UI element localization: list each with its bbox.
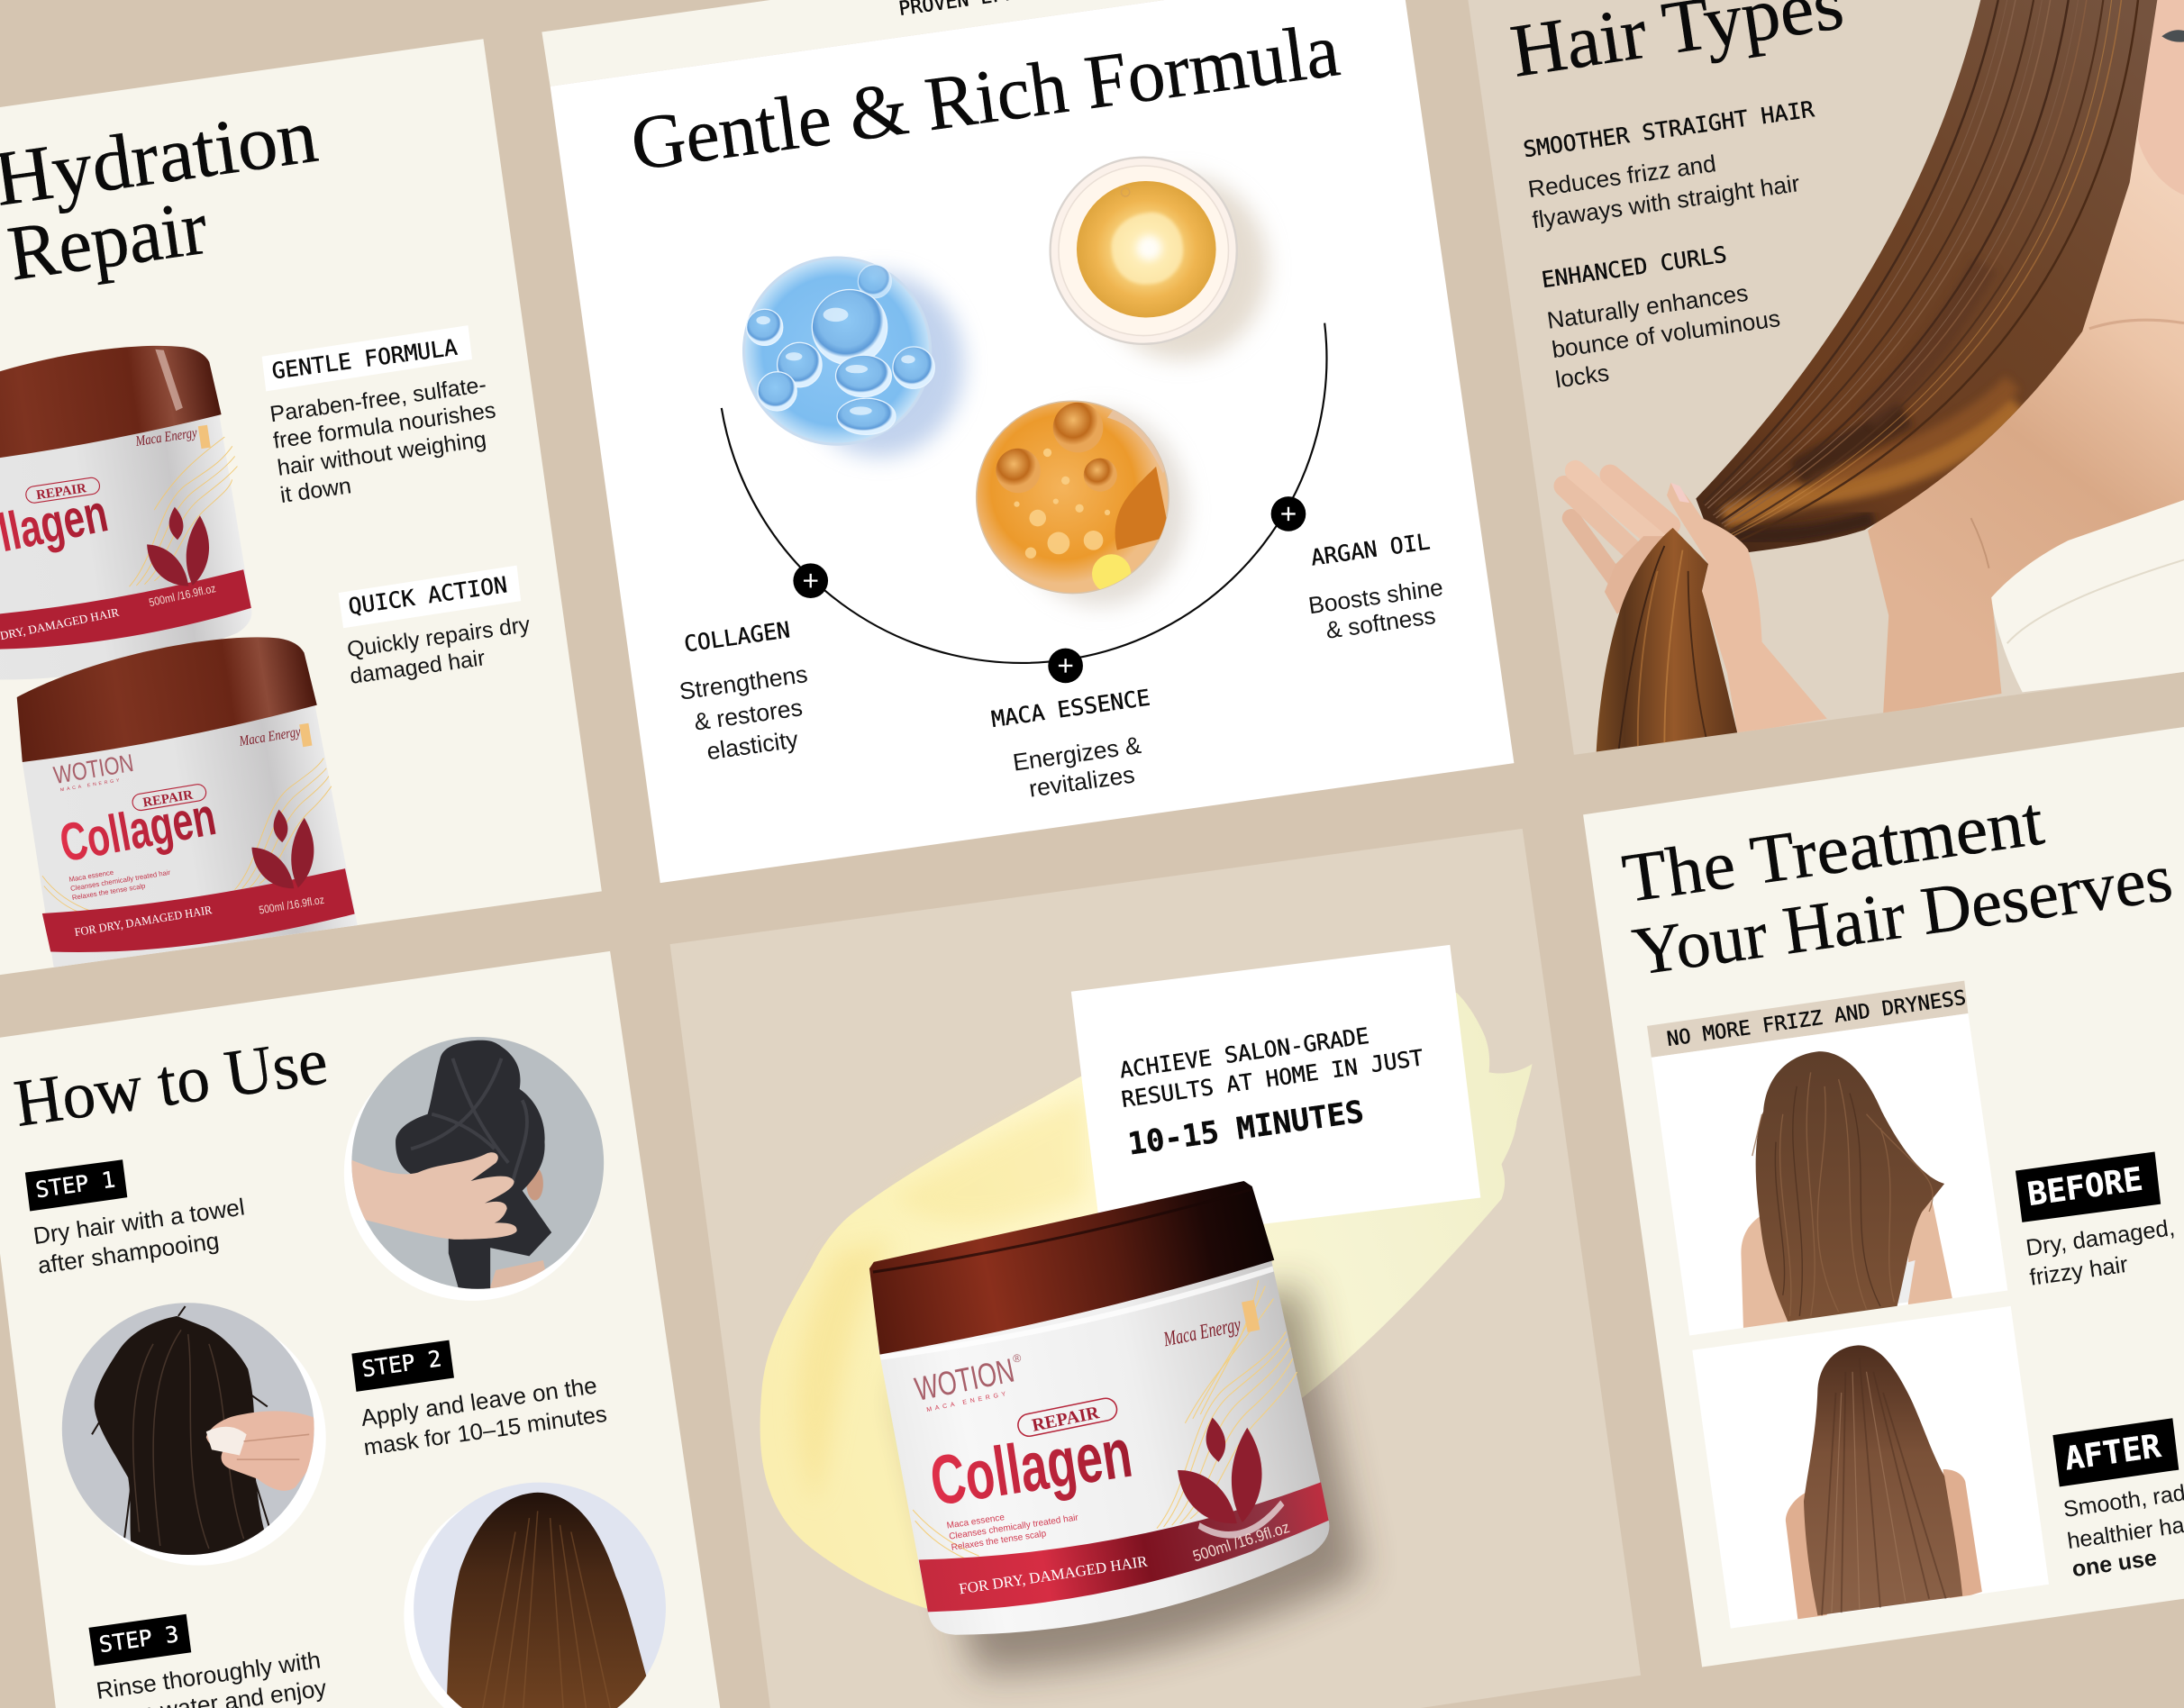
top strip with tagline: [541, 0, 1164, 86]
node: argan plus: [1271, 496, 1306, 531]
node: collagen plus: [793, 563, 828, 598]
label: collagen: & restores: [692, 694, 805, 736]
text: quick action description: damaged hair: [349, 646, 487, 689]
step 2 text: mask for 10–15 minutes: [362, 1402, 608, 1460]
step 1 tag: STEP 1: [34, 1166, 117, 1203]
jar label text: 500ml /16.9fl.oz: [1190, 1518, 1292, 1566]
text: after description: one use: [2070, 1545, 2159, 1582]
product jar: center: [856, 1178, 1340, 1655]
text: gentle formula description: free formula nourishes: [271, 397, 497, 454]
jar label text: Maca Energy: [1161, 1313, 1243, 1351]
step 3 tag: [88, 1614, 191, 1666]
tag: after: AFTER: [2062, 1428, 2163, 1477]
step 1 text: after shampooing: [36, 1227, 221, 1279]
step 2 tag: STEP 2: [360, 1345, 443, 1382]
panel: hydration repair: [0, 39, 602, 1009]
jar: upper: Maca Energy: [134, 425, 199, 450]
tag: gentle formula: GENTLE FORMULA: [270, 334, 459, 384]
skin: shoulder, arm and neck: [1868, 123, 2184, 713]
text: after description: [2061, 1475, 2184, 1582]
note card: RESULTS AT HOME IN JUST: [1120, 1044, 1425, 1113]
jar label text: [906, 1300, 1304, 1614]
jar: lower: Cleanses chemically treated hair: [70, 868, 171, 893]
jar: lower: [16, 637, 357, 968]
text: smoother straight hair: Reduces frizz and: [1526, 150, 1717, 203]
panel: salon-grade results: [670, 829, 1641, 1708]
photo: woman with long hair: [1564, 0, 2184, 753]
jar label text: WOTION: [912, 1351, 1017, 1408]
photo: rinsed straight hair: [404, 1476, 676, 1708]
text: gentle formula description: Paraben-free, sulfate-: [268, 372, 487, 427]
step 3 text: Rinse thoroughly with: [95, 1646, 323, 1704]
jar label text: MACA ENERGY: [926, 1391, 1010, 1413]
jar: upper: [0, 346, 251, 679]
jar label text: Cleanses chemically treated hair: [949, 1513, 1079, 1542]
jar: lower: FOR DRY, DAMAGED HAIR: [74, 903, 214, 939]
hand: fingers: [1564, 471, 1670, 585]
step 1 tag: [25, 1159, 127, 1211]
text: enhanced curls: Naturally enhances: [1545, 279, 1750, 334]
tag: after: [2052, 1418, 2179, 1486]
hand: holding thumb and forearm: [1667, 483, 1827, 734]
jar label text: Relaxes the tense scalp: [951, 1529, 1047, 1553]
node: maca plus: [1048, 649, 1083, 683]
text: enhanced curls: locks: [1553, 359, 1611, 393]
arc connector: [722, 323, 1326, 663]
step 2 tag: [351, 1340, 454, 1392]
jar: lower: Collagen: [55, 786, 220, 873]
heading: the treatment: Your Hair Deserves: [1628, 840, 2177, 990]
text: quick action description: [346, 613, 532, 689]
dish: collagen blue: [744, 258, 964, 457]
text: before description: Dry, damaged,: [2025, 1215, 2177, 1261]
heading: the treatment: The Treatment: [1618, 781, 2049, 917]
step 2 text: [359, 1371, 608, 1460]
text: gentle formula description: [268, 372, 497, 508]
jar: upper: 500ml /16.9fl.oz: [148, 582, 217, 609]
text: before description: frizzy hair: [2028, 1252, 2130, 1291]
jar: lower: MACA ENERGY: [60, 777, 123, 793]
dish: maca essence amber: [977, 390, 1187, 605]
heading: hydration repair: [0, 92, 323, 297]
step 3 tag: STEP 3: [97, 1621, 180, 1658]
label: argan oil: Boosts shine: [1306, 574, 1444, 619]
jar: lower: WOTION: [51, 749, 135, 789]
label: collagen: [678, 616, 809, 765]
note card: [1071, 945, 1480, 1244]
heading: how to use: How to Use: [10, 1024, 332, 1141]
jar: lower: Maca Energy: [238, 724, 303, 750]
jar label text: Maca essence: [946, 1513, 1006, 1531]
photo: after smooth hair: [1692, 1306, 2049, 1629]
label: maca essence: MACA ESSENCE: [989, 684, 1151, 732]
jar label text: Collagen: [925, 1414, 1137, 1521]
jar: lower: Relaxes the tense scalp: [71, 882, 146, 902]
long hair mass: [1671, 0, 2173, 564]
label: collagen: Strengthens: [678, 660, 809, 705]
photo: applying mask on wet hair: [56, 1295, 326, 1567]
text: before description: [2025, 1215, 2177, 1291]
lower hair: [1597, 528, 1738, 753]
label: argan oil: [1306, 528, 1444, 644]
photo: towel drying hair: [344, 1031, 613, 1301]
tag: before: [2016, 1151, 2161, 1222]
text: enhanced curls: ENHANCED CURLS: [1540, 241, 1728, 293]
label: maca essence: [989, 684, 1151, 803]
jar label text: ®: [1012, 1351, 1023, 1366]
jar shadow: [905, 1283, 1362, 1673]
label: collagen: elasticity: [705, 725, 800, 765]
text: gentle formula description: hair without weighing: [276, 427, 488, 481]
jar: lower: 500ml /16.9fl.oz: [258, 894, 325, 917]
text: smoother straight hair: flyaways with straight hair: [1531, 169, 1801, 233]
label: maca essence: revitalizes: [1027, 761, 1136, 803]
cream swatch: [760, 989, 1533, 1609]
tag: quick action: [339, 566, 521, 628]
step 2 text: Apply and leave on the: [359, 1371, 598, 1431]
label: collagen: COLLAGEN: [682, 616, 792, 657]
panel: the treatment your hair deserves: [1583, 727, 2184, 1667]
jar label text: FOR DRY, DAMAGED HAIR: [958, 1552, 1149, 1597]
text: smoother straight hair: SMOOTHER STRAIGHT HAIR: [1522, 95, 1815, 162]
step 1 text: Dry hair with a towel: [32, 1193, 246, 1249]
tag: gentle formula: [262, 325, 472, 391]
jar: lower: REPAIR: [141, 788, 194, 811]
label: argan oil: & softness: [1324, 602, 1437, 644]
text: enhanced curls: bounce of voluminous: [1550, 304, 1782, 363]
text: enhanced curls: [1540, 241, 1782, 393]
tag: quick action: QUICK ACTION: [347, 571, 509, 620]
text: smoother straight hair: [1522, 95, 1815, 233]
note card: ACHIEVE SALON-GRADE: [1118, 1022, 1370, 1083]
tag: before: BEFORE: [2025, 1161, 2145, 1213]
jar label text: REPAIR: [1030, 1403, 1101, 1436]
jar: upper: REPAIR: [35, 481, 87, 503]
dish: argan oil gold: [1051, 158, 1268, 359]
tag: no more frizz: NO MORE FRIZZ AND DRYNESS: [1665, 986, 1968, 1051]
panel: how to use: [0, 951, 720, 1708]
panel: gentle and rich formula: [541, 0, 1514, 883]
note card: 10-15 MINUTES: [1125, 1094, 1366, 1161]
label: argan oil: ARGAN OIL: [1309, 528, 1432, 571]
product jars stacked: [0, 332, 363, 1009]
dress: [1991, 500, 2184, 692]
step 1 text: [32, 1193, 246, 1279]
text: quick action description: Quickly repairs dry: [346, 613, 532, 662]
panel: hair types: [1468, 0, 2184, 755]
heading: gentle and rich formula: Gentle & Rich Formula: [626, 7, 1344, 186]
photo: before frizzy hair: [1652, 1013, 2007, 1344]
label: maca essence: Energizes &: [1011, 731, 1143, 777]
jar: lower: Maca essence: [68, 868, 114, 884]
text: gentle formula description: it down: [278, 473, 353, 508]
heading: hydration repair: Repair: [3, 184, 213, 297]
